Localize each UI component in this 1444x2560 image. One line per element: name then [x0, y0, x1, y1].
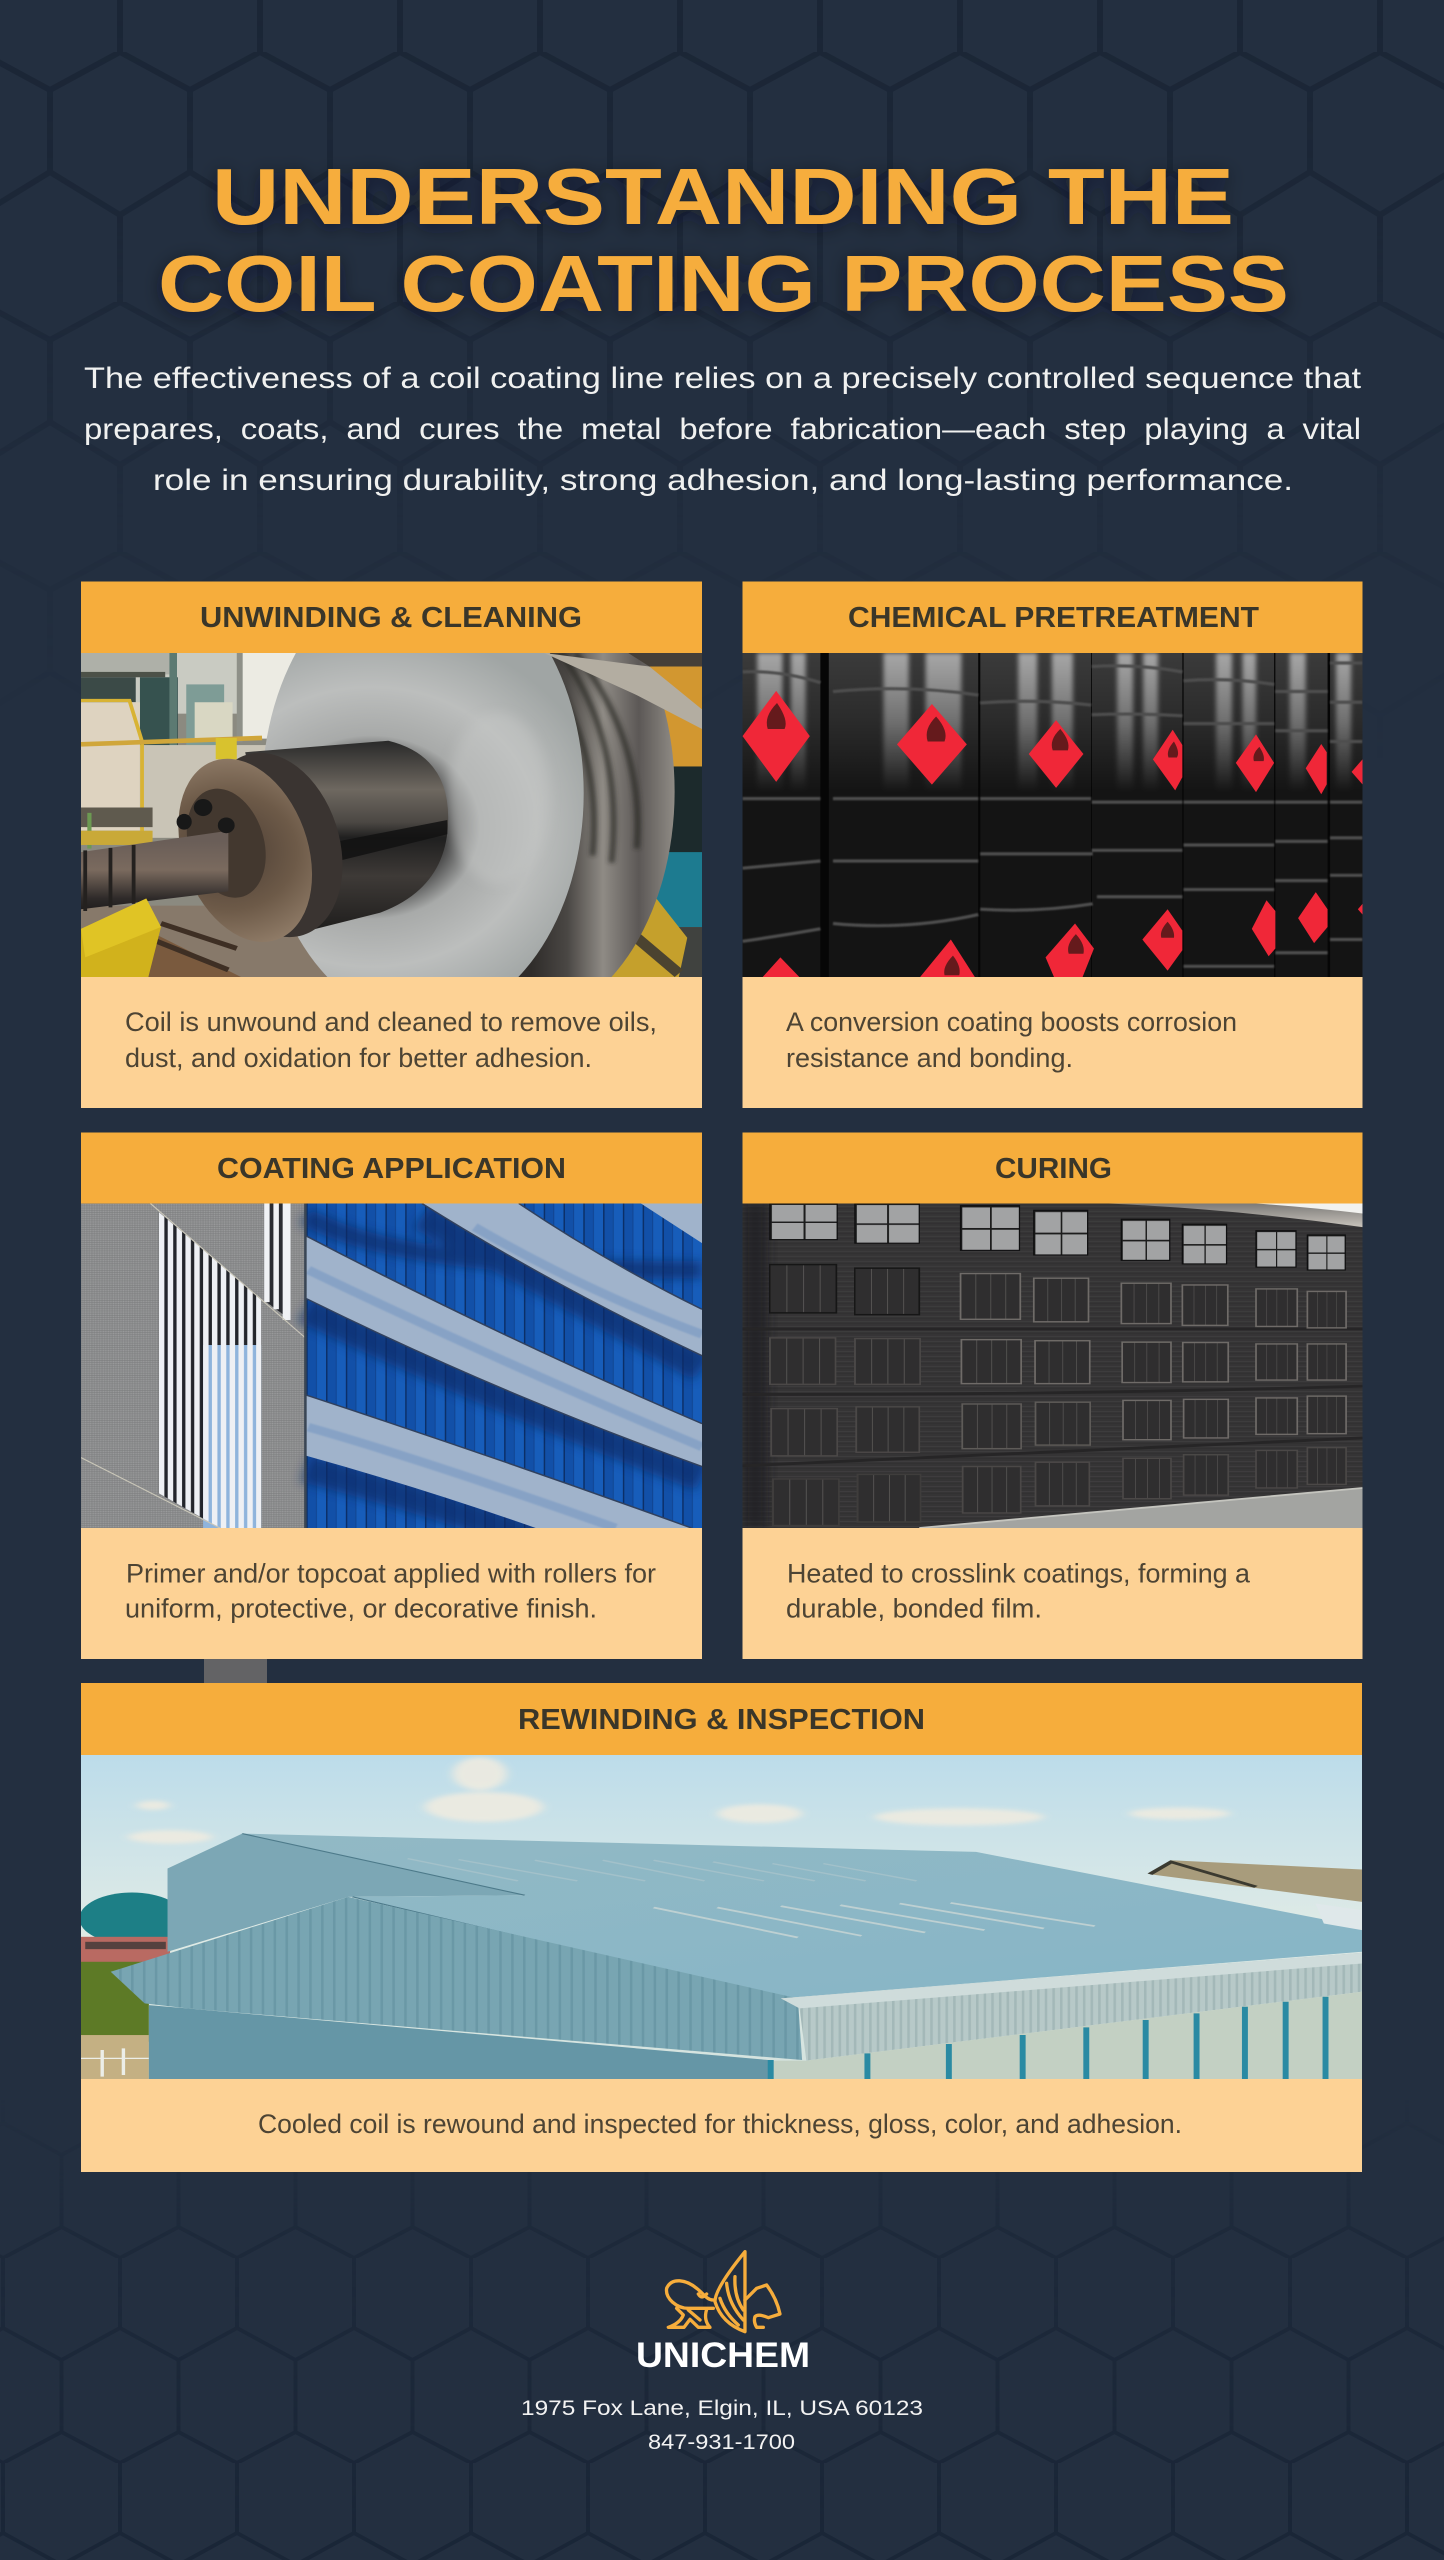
intro paragraph: role in ensuring durability, strong adhesion, and long-lasting performance.: [153, 464, 1293, 497]
connector stub between panels: [204, 1659, 267, 1683]
description text: Heated to crosslink coatings, forming a: [787, 1558, 1250, 1588]
description card: [81, 2079, 1362, 2172]
description text: durable, bonded film.: [786, 1594, 1042, 1624]
description card: [81, 1528, 702, 1659]
panel header bar: [742, 582, 1362, 654]
panel header bar: [81, 1132, 702, 1204]
description text: Cooled coil is rewound and inspected for thickness, gloss, color, and adhesion.: [258, 2109, 1182, 2139]
title: UNDERSTANDING THE: [212, 152, 1234, 241]
description text: [786, 1007, 1237, 1073]
heading: chemical pretreatment: CHEMICAL PRETREATMENT: [848, 602, 1259, 634]
heading: curing: CURING: [995, 1153, 1112, 1185]
phone number: 847-931-1700: [648, 2430, 795, 2454]
panel header bar: [81, 582, 702, 654]
description text: resistance and bonding.: [786, 1043, 1073, 1073]
footer: [521, 2252, 923, 2454]
heading: coating application: COATING APPLICATION: [217, 1153, 566, 1185]
description text: A conversion coating boosts corrosion: [786, 1007, 1237, 1037]
description text: dust, and oxidation for better adhesion.: [125, 1043, 592, 1073]
description text: [125, 1007, 657, 1073]
panel: coating application: [81, 1132, 702, 1659]
description card: [81, 977, 702, 1108]
address: 1975 Fox Lane, Elgin, IL, USA 60123: [521, 2396, 923, 2420]
photo: dark coated garage door: [742, 1204, 1362, 1528]
photo: steel coil on mandrel: [81, 653, 702, 977]
brand name: UNICHEM: [636, 2336, 810, 2375]
description card: [742, 977, 1362, 1108]
panel: rewinding and inspection: [79, 1683, 1362, 2172]
panel header bar: [81, 1683, 1362, 1755]
panel: chemical pretreatment: [742, 582, 1362, 1108]
photo: building facade with blue glazing: [81, 1204, 702, 1528]
photo: black chemical drums with red labels: [742, 653, 1362, 977]
description text: Coil is unwound and cleaned to remove oils,: [125, 1007, 657, 1037]
description text: uniform, protective, or decorative finish.: [125, 1594, 597, 1624]
heading: unwinding and cleaning: UNWINDING & CLEANING: [200, 602, 582, 634]
panel header bar: [742, 1132, 1362, 1204]
photo: metal roofed industrial building: [81, 1755, 1362, 2079]
title: [158, 152, 1289, 328]
description text: [786, 1558, 1250, 1624]
icon: griffin logo: [666, 2252, 780, 2332]
title: COIL COATING PROCESS: [158, 239, 1289, 328]
panel: curing: [742, 1132, 1362, 1659]
panel: unwinding and cleaning: [81, 560, 702, 1108]
description text: [125, 1558, 656, 1624]
heading: rewinding and inspection: REWINDING & INSPECTION: [518, 1704, 925, 1736]
intro paragraph: [84, 362, 1362, 497]
description card: [742, 1528, 1362, 1659]
intro paragraph: prepares, coats, and cures the metal before fabrication—each step playing a vital: [84, 413, 1361, 446]
description text: Primer and/or topcoat applied with rollers for: [126, 1558, 656, 1588]
intro paragraph: The effectiveness of a coil coating line relies on a precisely controlled sequence that: [84, 362, 1362, 395]
